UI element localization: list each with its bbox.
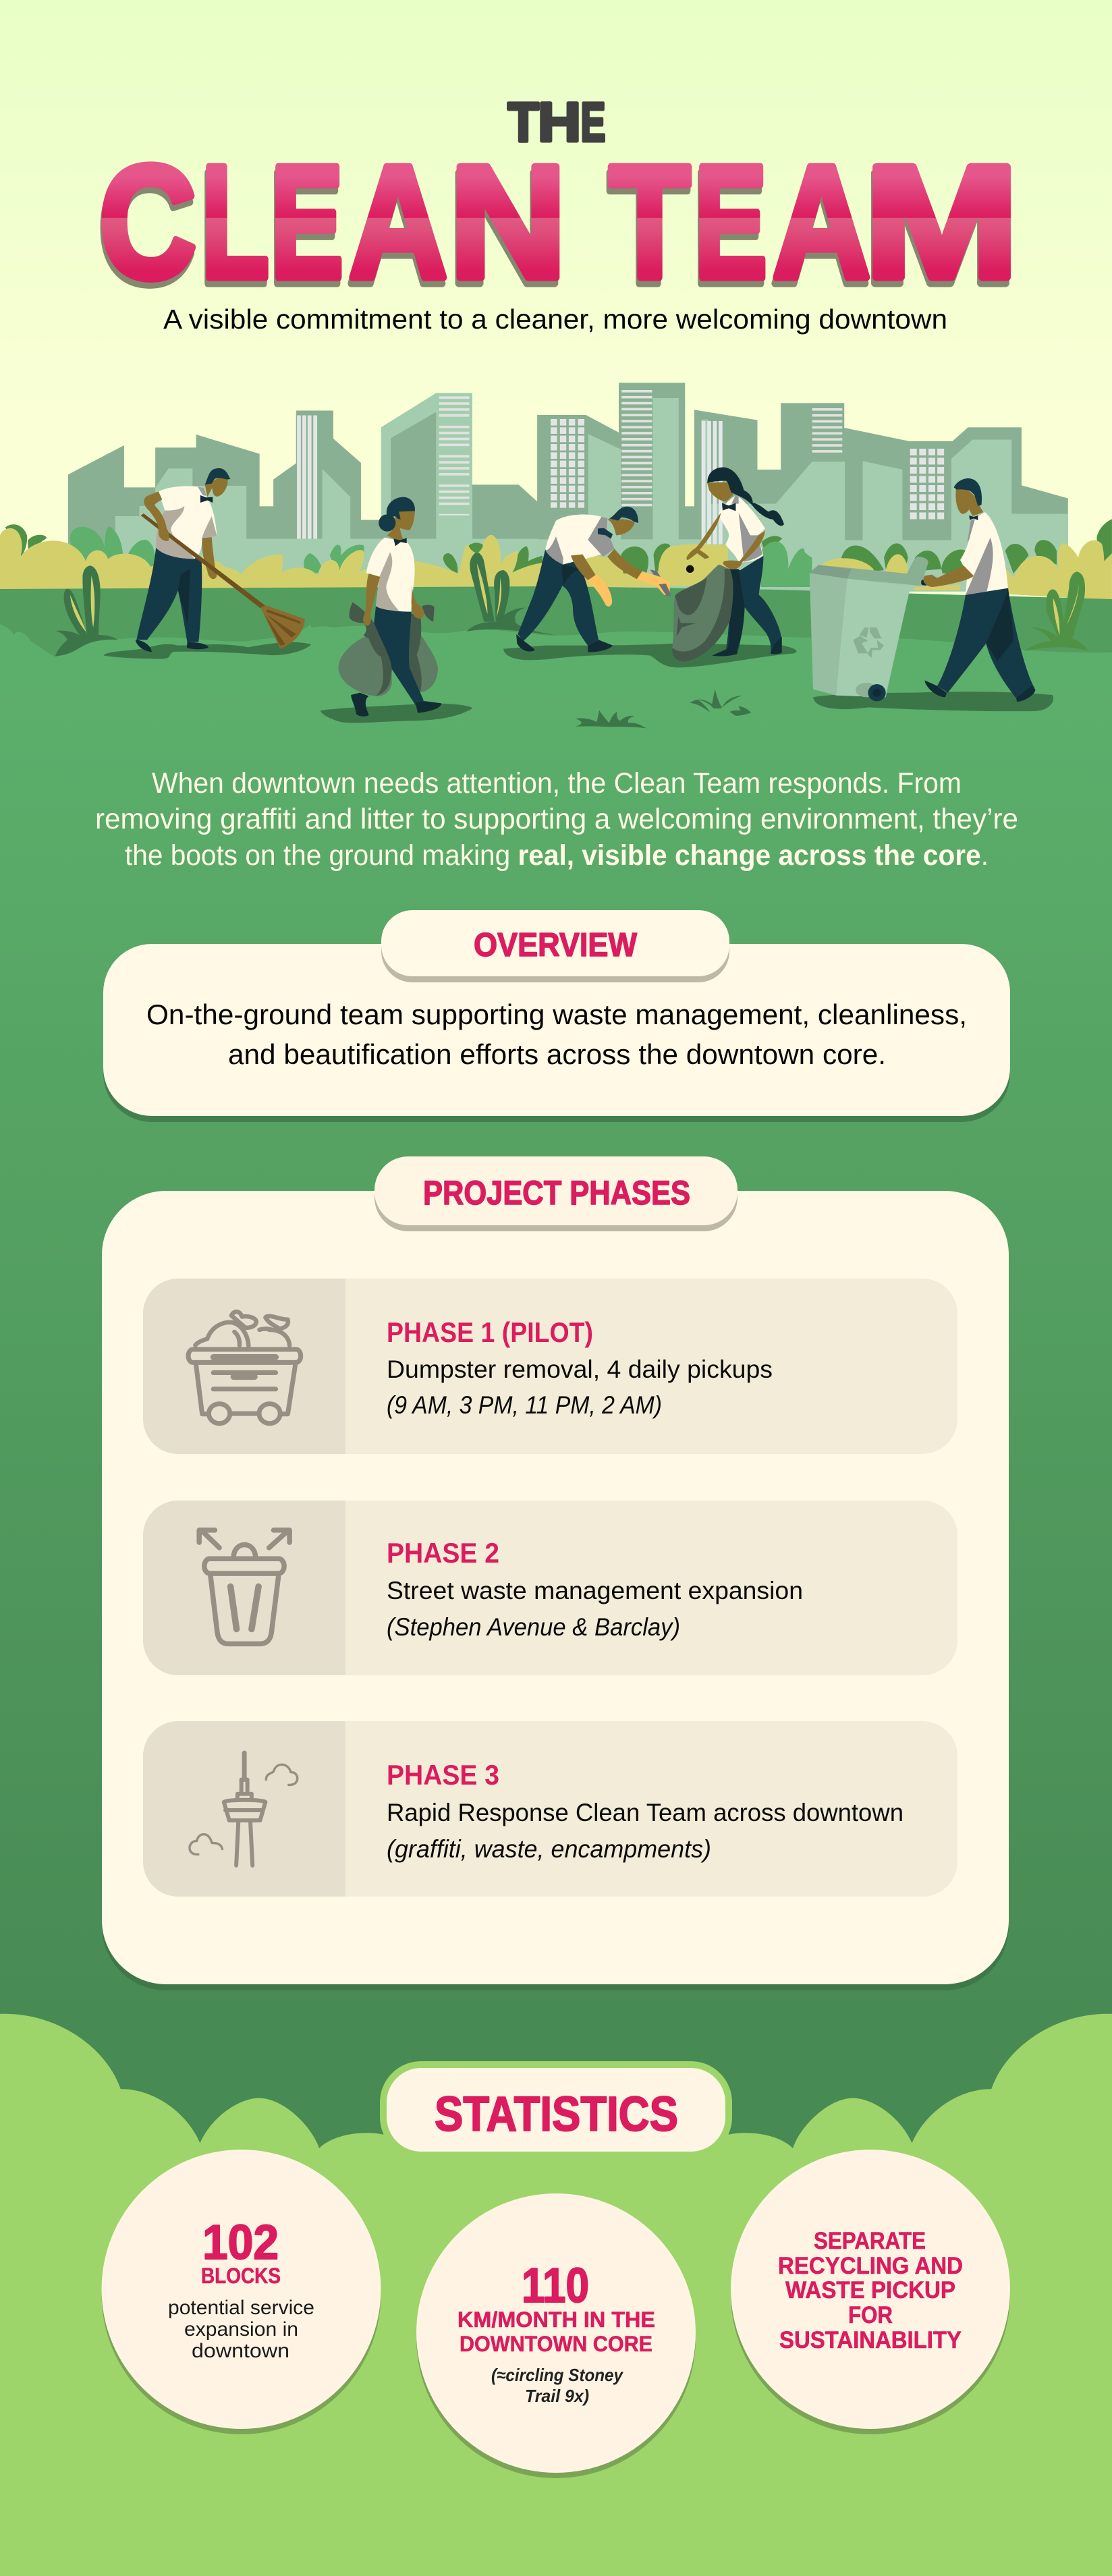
trousers xyxy=(374,606,424,705)
stat: 102 blocks: 102 xyxy=(202,2216,279,2270)
panel: overview xyxy=(103,910,1010,1122)
panel: statistics heading xyxy=(383,2065,729,2155)
intro paragraph xyxy=(95,767,1018,872)
phase 2 text: PHASE 2 xyxy=(387,1537,499,1569)
stat: 102 blocks: potential service xyxy=(168,2297,314,2319)
head xyxy=(205,478,228,497)
icon: bin with arrows xyxy=(199,1530,289,1644)
panel: project phases xyxy=(102,1156,1009,1990)
phase 1 row: (9 AM, 3 PM, 11 PM, 2 AM) xyxy=(387,1391,662,1419)
background sky xyxy=(0,0,1112,675)
worker carrying bags xyxy=(321,497,472,723)
stat: separate recycling: RECYCLING AND xyxy=(778,2253,963,2279)
stat: 110 km per month: 110 xyxy=(522,2259,589,2313)
panel: overview: and beautification efforts across the downtown core. xyxy=(228,1038,886,1070)
head xyxy=(607,519,635,535)
plant right xyxy=(1024,571,1088,651)
stat: 102 blocks: downtown xyxy=(192,2340,289,2362)
trousers xyxy=(726,555,781,654)
plant left xyxy=(55,565,117,656)
ground back xyxy=(0,586,1112,675)
head xyxy=(387,511,415,541)
rake xyxy=(141,513,266,609)
stat: separate recycling: FOR xyxy=(848,2302,893,2328)
bag xyxy=(672,565,733,662)
handle grip xyxy=(921,580,928,586)
city skyline xyxy=(68,383,1068,592)
shirt xyxy=(545,515,615,565)
ground front xyxy=(0,624,1112,681)
title xyxy=(99,92,1019,335)
arms xyxy=(363,573,424,626)
stat: 110 km per month: (≈circling Stoney xyxy=(491,2365,623,2385)
overview text: On-the-ground team supporting waste management, cleanliness, xyxy=(146,999,967,1030)
shirt xyxy=(366,538,415,612)
background lawn xyxy=(0,648,1112,2576)
intro paragraph: the boots on the ground making real, visible change across the core. xyxy=(125,839,989,872)
title: CLEAN TEAM: L xyxy=(201,133,269,312)
arms and gloves xyxy=(571,549,642,580)
phase 3 row: Rapid Response Clean Team across downtown xyxy=(387,1799,904,1826)
litter xyxy=(686,565,694,573)
phase 1 text: PHASE 1 (PILOT) xyxy=(387,1316,593,1348)
arm far xyxy=(202,537,217,579)
shadow xyxy=(103,642,311,659)
arm near xyxy=(144,491,169,541)
stat: separate recycling: SEPARATE xyxy=(814,2228,926,2254)
phase 3 row xyxy=(143,1721,957,1897)
worker with gloves xyxy=(503,507,796,667)
phase 2 row: (Stephen Avenue & Barclay) xyxy=(387,1613,680,1641)
shirt xyxy=(960,512,1008,595)
head xyxy=(955,488,983,516)
bushes right xyxy=(553,519,1112,600)
title: CLEAN TEAM: E xyxy=(694,133,767,312)
phase 2 row xyxy=(143,1501,957,1675)
shirt xyxy=(719,496,765,562)
subtitle: A visible commitment to a cleaner, more welcoming downtown xyxy=(163,304,947,335)
title: CLEAN TEAM: M xyxy=(864,133,1019,312)
title: CLEAN TEAM: A xyxy=(349,133,447,312)
stat: 110 km per month: DOWNTOWN CORE xyxy=(460,2332,652,2356)
bushes xyxy=(0,519,1112,600)
worker with rake xyxy=(103,468,311,659)
statistics hills xyxy=(0,2014,1112,2576)
title: CLEAN TEAM: C xyxy=(99,133,196,312)
head and hair xyxy=(707,482,733,501)
bags xyxy=(339,625,392,696)
heading: project phases: PROJECT PHASES xyxy=(423,1174,690,1212)
rear leg xyxy=(351,693,368,717)
title: CLEAN TEAM: N xyxy=(449,133,567,312)
title: THE: H xyxy=(538,92,581,153)
intro paragraph: When downtown needs attention, the Clean Team responds. From xyxy=(152,767,962,800)
grass tufts xyxy=(576,690,751,728)
trousers xyxy=(937,588,1034,698)
heading: overview: OVERVIEW xyxy=(474,927,638,963)
stat: separate recycling xyxy=(731,2150,1010,2434)
heading: statistics: STATISTICS xyxy=(435,2088,678,2141)
trousers xyxy=(518,549,599,646)
stat: separate recycling: SUSTAINABILITY xyxy=(779,2327,962,2353)
title: THE: E xyxy=(580,92,606,153)
stat: 102 blocks: expansion in xyxy=(184,2318,298,2341)
recycling bin xyxy=(810,557,928,701)
icon: recycling symbol xyxy=(853,627,884,658)
stat: 110 km per month: KM/MONTH IN THE xyxy=(457,2307,655,2332)
phase 3 text: PHASE 3 xyxy=(387,1759,499,1791)
worker with bag xyxy=(672,468,784,662)
phase 2 row: Street waste management expansion xyxy=(387,1577,803,1604)
stat: 110 km per month: Trail 9x) xyxy=(525,2386,589,2406)
bushes left xyxy=(0,524,556,592)
buildings right half xyxy=(538,383,1068,592)
phase 1 row: Dumpster removal, 4 daily pickups xyxy=(387,1355,773,1383)
arm xyxy=(923,565,974,587)
stat: 102 blocks xyxy=(101,2150,381,2434)
shadow xyxy=(321,703,472,723)
title: THE: T xyxy=(507,92,538,153)
buildings left half xyxy=(68,393,556,592)
worker pushing bin xyxy=(810,478,1053,711)
shirt xyxy=(156,486,217,559)
plant centre xyxy=(466,542,556,636)
title: CLEAN TEAM: T xyxy=(609,133,690,312)
intro paragraph: removing graffiti and litter to supporting a welcoming environment, they’re xyxy=(95,803,1018,835)
title: CLEAN TEAM: E xyxy=(271,133,343,312)
phase 1 row xyxy=(143,1279,957,1454)
shadow xyxy=(813,692,1053,711)
arms xyxy=(686,513,765,569)
shadow xyxy=(503,643,796,667)
trousers xyxy=(136,548,202,642)
stat: separate recycling: WASTE PICKUP xyxy=(785,2277,955,2303)
phase 3 row: (graffiti, waste, encampments) xyxy=(387,1835,711,1863)
stat: 102 blocks: BLOCKS xyxy=(201,2264,281,2288)
stat: 110 km per month xyxy=(416,2193,696,2478)
icon: dumpster xyxy=(188,1312,301,1424)
icon: tower with clouds xyxy=(190,1753,298,1866)
title: CLEAN TEAM: A xyxy=(773,133,870,312)
